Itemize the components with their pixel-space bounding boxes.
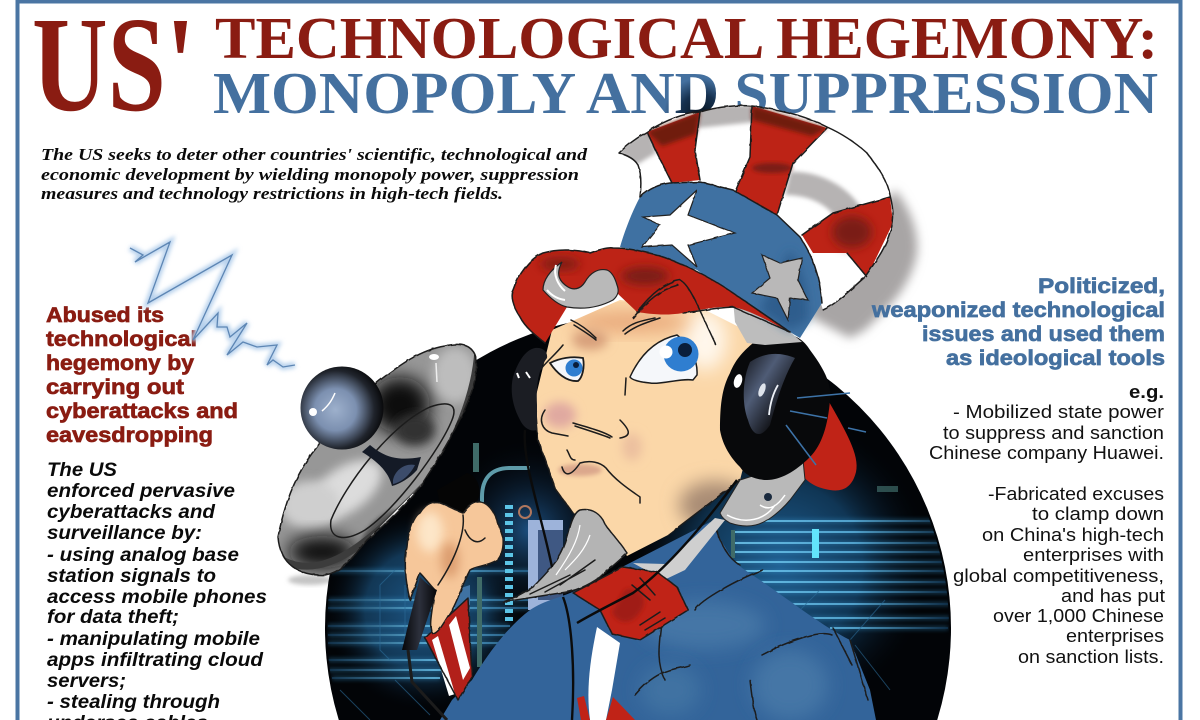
left body text: surveillance by: xyxy=(47,522,202,544)
shirt front xyxy=(588,627,620,720)
mouth xyxy=(562,450,640,503)
dish drop shadow xyxy=(288,575,332,585)
left heading: technological xyxy=(46,327,197,351)
right body text: to suppress and sanction xyxy=(943,423,1164,443)
left body text: apps infiltrating cloud xyxy=(47,649,264,671)
hat band xyxy=(620,182,822,338)
left heading: cyberattacks and xyxy=(46,399,238,423)
grey star xyxy=(752,255,808,320)
glowing line halo xyxy=(328,521,950,678)
left body text: station signals to xyxy=(47,565,216,587)
left body text: access mobile phones xyxy=(47,586,267,608)
hat outline xyxy=(619,106,893,310)
beard xyxy=(503,509,627,602)
wrist sleeve patch xyxy=(455,585,470,612)
stripe shading xyxy=(647,112,700,146)
right body text: global competitiveness, xyxy=(953,566,1164,586)
right body text: - Mobilized state power xyxy=(953,402,1164,422)
left body text: - manipulating mobile xyxy=(47,628,260,650)
left body text xyxy=(47,459,267,720)
right body text: on sanction lists. xyxy=(1018,647,1164,667)
right body text: -Fabricated excuses xyxy=(988,484,1164,504)
left body text: The US xyxy=(47,459,117,481)
left body text: servers; xyxy=(47,670,126,692)
teal blocks xyxy=(473,443,898,667)
headphone sparks xyxy=(786,393,866,465)
right body text: enterprises xyxy=(1066,626,1164,646)
left body text: - stealing through xyxy=(47,691,220,713)
circuit traces xyxy=(340,570,890,720)
jaw outline xyxy=(535,400,740,535)
title line 2: MONOPOLY AND SUPPRESSION xyxy=(213,60,1158,126)
forelock hair xyxy=(543,262,618,308)
brim edge strokes xyxy=(633,280,790,345)
right heading: as ideological tools xyxy=(946,346,1165,370)
icon: lightning signal xyxy=(130,242,295,367)
title xyxy=(32,0,1158,140)
sleeve cuff xyxy=(425,598,472,700)
right body text: and has put xyxy=(1061,586,1165,606)
headphone wires xyxy=(525,430,737,720)
title line 1: TECHNOLOGICAL HEGEMONY: xyxy=(215,5,1158,71)
hat inner shadow xyxy=(784,170,862,214)
hand xyxy=(405,502,503,634)
intro text xyxy=(41,145,588,203)
striped hat xyxy=(615,105,893,310)
right body text: over 1,000 Chinese xyxy=(993,606,1164,626)
right heading: issues and used them xyxy=(922,322,1165,346)
left body text: enforced pervasive xyxy=(47,480,235,502)
left body text: for data theft; xyxy=(47,606,179,628)
face xyxy=(535,300,775,556)
mount behind hand xyxy=(437,473,480,514)
left heading: carrying out xyxy=(46,375,184,399)
right body text: to clamp down xyxy=(1032,504,1164,524)
circuit background circle xyxy=(320,310,960,720)
ear pad xyxy=(744,354,795,434)
left heading: eavesdropping xyxy=(46,423,213,447)
lower chip strip xyxy=(510,690,565,720)
circuit ring xyxy=(519,506,531,518)
shirt stripes xyxy=(577,696,635,720)
intro text: The US seeks to deter other countries' scientific, technological and xyxy=(41,145,588,164)
right body text: on China's high-tech xyxy=(982,525,1164,545)
left eye xyxy=(550,357,584,381)
left heading: hegemony by xyxy=(46,351,194,375)
eyebrows and lids xyxy=(540,318,660,395)
side hair under band xyxy=(733,300,802,345)
right eye xyxy=(630,335,698,383)
red stripes xyxy=(647,112,700,183)
bow tie xyxy=(573,567,688,640)
left heading xyxy=(46,303,238,447)
right headphone xyxy=(720,333,866,480)
right body text xyxy=(929,382,1165,667)
dish inner rim xyxy=(331,404,454,537)
nose xyxy=(541,410,628,438)
connector column xyxy=(505,505,513,621)
right body text: e.g. xyxy=(1129,382,1164,402)
cyan bar xyxy=(812,529,819,558)
coat fold lines xyxy=(635,525,868,720)
left headphone xyxy=(512,348,547,431)
dish stem xyxy=(362,445,421,486)
receiver ball xyxy=(300,366,384,450)
right heading: weaponized technological xyxy=(871,298,1165,322)
teal circuit trace xyxy=(480,466,530,502)
coat xyxy=(440,522,876,720)
intro text: measures and technology restrictions in high-tech fields. xyxy=(41,184,503,203)
right heading xyxy=(871,274,1165,370)
dish outline xyxy=(278,344,476,575)
big white star xyxy=(642,190,735,267)
left body text: cyberattacks and xyxy=(47,501,216,523)
hair right xyxy=(720,460,805,526)
microphone xyxy=(402,577,447,720)
hat drop shadow xyxy=(800,190,917,338)
glowing circuit lines, left xyxy=(328,571,530,678)
left body text: - using analog base xyxy=(47,544,239,566)
glowing circuit lines, right xyxy=(735,521,950,628)
illustration: Uncle Sam xyxy=(278,105,917,720)
headphone ear pad red hat back xyxy=(800,400,857,490)
collar and neck xyxy=(633,518,725,580)
satellite dish xyxy=(278,344,478,575)
hat brim xyxy=(512,248,790,343)
chip block xyxy=(528,520,563,610)
left heading: Abused its xyxy=(46,303,164,327)
right heading: Politicized, xyxy=(1038,274,1165,298)
right body text: enterprises with xyxy=(1023,545,1164,565)
intro text: economic development by wielding monopoly power, suppression xyxy=(41,165,579,184)
right body text: Chinese company Huawei. xyxy=(929,443,1164,463)
